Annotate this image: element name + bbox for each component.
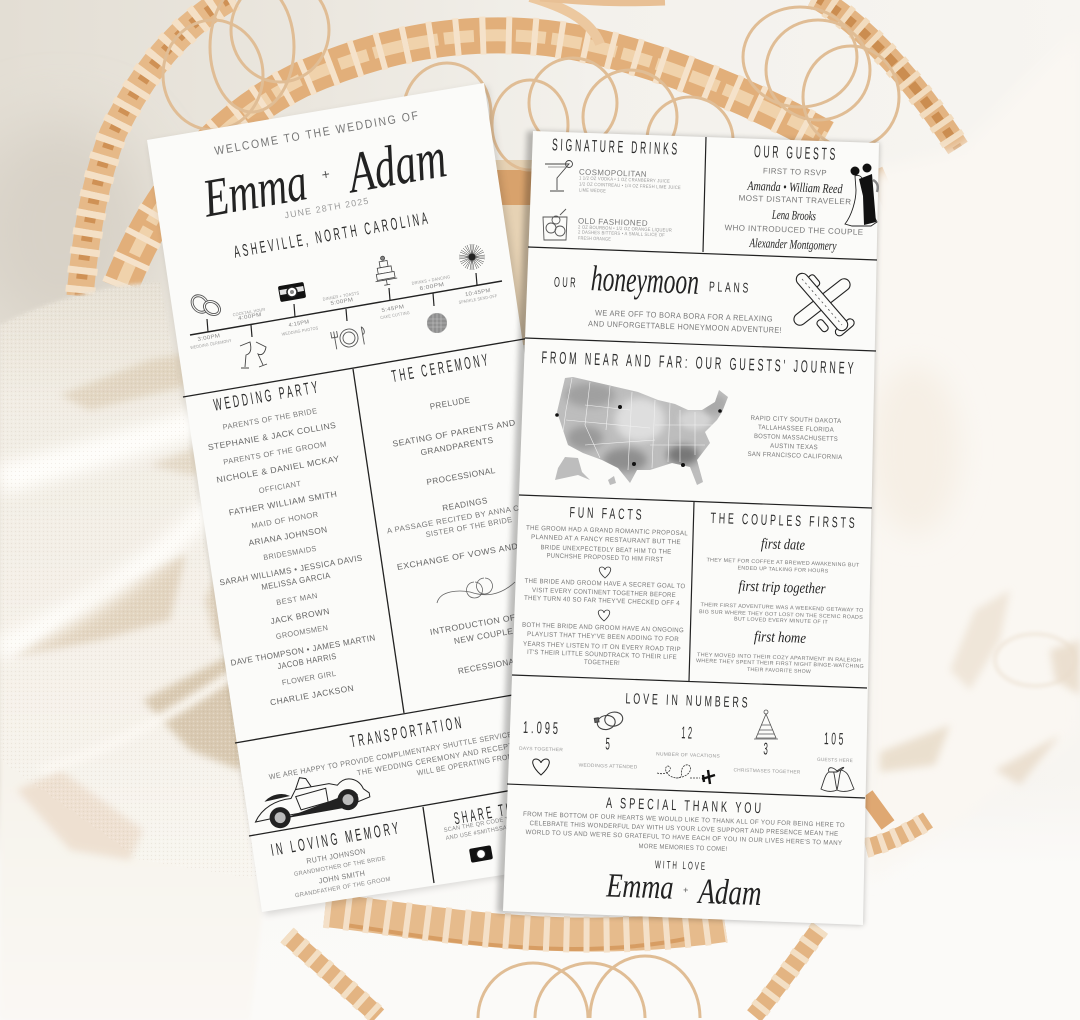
panel: the couples firsts: first date [761, 536, 806, 554]
panel: the couples firsts: THEY MOVED INTO THEIR COZY APARTMENT IN RALEIGH [697, 652, 861, 664]
section dividers [183, 338, 530, 883]
panel: fun facts [522, 504, 688, 667]
panel: wedding party: JACOB HARRIS [277, 651, 337, 671]
loops: rattan rings [163, 0, 899, 1018]
couple names script [198, 124, 451, 229]
panel: guests journey map: TALLAHASSEE FLORIDA [758, 424, 834, 434]
panel: wedding party: STEPHANIE & JACK COLLINS [207, 420, 337, 452]
panel: wedding party: FATHER WILLIAM SMITH [228, 489, 338, 517]
panel: love in numbers: NUMBER OF VACATIONS [656, 751, 720, 760]
panel: the couples firsts: WHERE THEY SPENT THEIR FIRST NIGHT BINGE-WATCHING [696, 658, 864, 670]
side rim right of card [875, 170, 892, 208]
timeline: SPARKLE SEND-OFF [458, 293, 498, 305]
panel: wedding party: CHARLIE JACKSON [269, 683, 355, 707]
lace veil: right [868, 30, 1080, 880]
signature names script: Emma [605, 867, 674, 907]
panel: a special thank you: WITH LOVE [655, 859, 707, 873]
panel: transportation: TRANSPORTATION [349, 713, 465, 751]
panel: wedding party: GROOMSMEN [275, 623, 329, 641]
panel: wedding party: BEST MAN [276, 591, 318, 607]
timeline: 3:00PM [197, 333, 221, 343]
panel: our guests: Lena Brooks [771, 207, 816, 223]
inner rim top [120, 0, 825, 288]
panel: fun facts: PUNCHSHE PROPOSED TO HIM FIRST [546, 552, 664, 564]
panel: love in numbers: 3 [763, 739, 771, 759]
icon: champagne glasses [240, 342, 267, 368]
panel: guests journey map: RAPID CITY SOUTH DAKOTA [750, 415, 842, 425]
panel: the ceremony: GRANDPARENTS [420, 435, 494, 457]
couple names script: + [320, 165, 332, 183]
panel: love in numbers: LOVE IN NUMBERS [625, 690, 751, 712]
panel: the couples firsts: THE COUPLES FIRSTS [710, 510, 858, 532]
panel: the couples firsts: THEIR FIRST ADVENTURE WAS A WEEKEND GETAWAY TO [700, 602, 864, 614]
timeline: WEDDING CEREMONY [190, 338, 232, 350]
panel: the couples firsts: ENDED UP TALKING FOR HOURS [737, 565, 829, 575]
panel: the couples firsts: BIG SUR WHERE THEY GOT LOST ON THE SCENIC ROADS [699, 609, 863, 621]
panel: signature drinks: 1/2 OZ COINTREAU • 1/4 OZ FRESH LIME JUICE [579, 182, 681, 191]
panel: guests journey map: AUSTIN TEXAS [770, 443, 818, 451]
icon: sparkler [459, 244, 485, 270]
panel: love in numbers [519, 690, 854, 791]
panel: wedding party: NICHOLE & DANIEL MCKAY [216, 453, 340, 485]
panel: share: SCAN THE QR CODE TO UPLOAD [443, 811, 540, 834]
panel: the couples firsts: first trip together [738, 578, 826, 598]
icon: wedding rings [187, 291, 223, 319]
panel: honeymoon plans [554, 258, 856, 337]
couple names script: Adam [340, 124, 451, 206]
panel: fun facts: TOGETHER! [584, 659, 620, 667]
panel: love in numbers: 12 [681, 723, 695, 743]
outer rim right [813, 0, 958, 148]
panel: signature drinks: 2 OZ BOURBON • 1/2 OZ ORANGE LIQUEUR [578, 225, 672, 234]
icon: wedding bells [821, 767, 854, 791]
panel: fun facts: IT'S THEIR LITTLE SOUNDTRACK TO THEIR LIFE [527, 649, 677, 661]
panel: in loving memory: GRANDFATHER OF THE GROOM [295, 877, 391, 899]
panel: love in numbers: 1.095 [523, 718, 561, 738]
panel: in loving memory: RUTH JOHNSON [306, 846, 366, 866]
panel: signature drinks [543, 135, 681, 243]
panel: wedding party: WEDDING PARTY [212, 377, 322, 415]
panel: the ceremony: RECESSIONAL [457, 655, 520, 676]
panel: share [443, 791, 560, 863]
panel: love in numbers: 5 [605, 734, 613, 754]
panel: in loving memory [269, 818, 403, 899]
panel: signature drinks: SIGNATURE DRINKS [552, 135, 680, 159]
panel: signature drinks: FRESH ORANGE [578, 236, 611, 243]
woven band bottom [325, 910, 725, 949]
icon: old fashioned glass [543, 209, 567, 240]
icon: wedding cake [371, 254, 398, 287]
icon: camera [278, 282, 306, 302]
panel: a special thank you: FROM THE BOTTOM OF OUR HEARTS WE WOULD LIKE TO THANK ALL OF YOU FOR BEING HERE TO [523, 811, 845, 829]
panel: fun facts: BOTH THE BRIDE AND GROOM HAVE AN ONGOING [522, 622, 684, 634]
panel: wedding party: PARENTS OF THE GROOM [223, 439, 327, 467]
timeline: COCKTAIL HOUR [232, 307, 266, 317]
panel: honeymoon plans: WE ARE OFF TO BORA BORA FOR A RELAXING [595, 308, 773, 324]
panel: wedding party: OFFICIANT [258, 479, 302, 495]
icon: airplane [792, 271, 856, 337]
panel: wedding party: BRIDESMAIDS [263, 544, 317, 562]
location: ASHEVILLE, NORTH CAROLINA [232, 208, 432, 262]
panel: signature drinks: OLD FASHIONED [578, 217, 648, 228]
timeline: 6:00PM [419, 282, 445, 292]
panel: our guests: OUR GUESTS [754, 142, 838, 164]
panel: fun facts: BRIDE UNEXPECTEDLY BEAT HIM TO THE [540, 544, 672, 556]
icon: vintage car [249, 766, 372, 832]
icon: small camera [469, 845, 493, 863]
timeline: DINNER + TOASTS [322, 290, 360, 302]
panel: our guests: FIRST TO RSVP [763, 166, 827, 178]
panel: wedding party: MAID OF HONOR [251, 510, 319, 530]
panel: guests journey map [541, 348, 857, 490]
panel: the couples firsts [696, 510, 864, 675]
icon: heart [598, 610, 610, 621]
rim bottom left [287, 935, 378, 1016]
signature names script [605, 867, 762, 913]
panel: love in numbers: GUESTS HERE [817, 757, 853, 764]
icon: plate and cutlery [331, 326, 367, 350]
timeline: 4:00PM [238, 312, 262, 322]
panel: the couples firsts: BUT LOVED EVERY MINUTE OF IT [734, 616, 829, 626]
panel: the ceremony: INTRODUCTION OF THE [429, 608, 537, 637]
panel: the ceremony: PROCESSIONAL [426, 465, 496, 487]
panel: signature drinks: LIME WEDGE [579, 188, 606, 194]
panel: wedding party: FLOWER GIRL [281, 669, 337, 687]
panel: our guests: WHO INTRODUCED THE COUPLE [724, 223, 864, 237]
panel: fun facts: THEY TURN 40 SO FAR THEY'VE CHECKED OFF 4 [524, 595, 680, 607]
panel: the couples firsts: THEIR FAVORITE SHOW [747, 667, 811, 675]
panel: our guests [724, 142, 878, 253]
icon: disco ball [427, 313, 447, 333]
panel: love in numbers: WEDDINGS ATTENDED [578, 762, 638, 771]
icon: heart [533, 759, 549, 775]
panel: the couples firsts: THEY MET FOR COFFEE AT BREWED AWAKENING BUT [706, 557, 860, 569]
rim bottom right [754, 928, 820, 1016]
panel: a special thank you: MORE MEMORIES TO COME! [638, 843, 728, 853]
heading: welcome: WELCOME TO THE WEDDING OF [213, 108, 421, 158]
panel: fun facts: THE BRIDE AND GROOM HAVE A SECRET GOAL TO [524, 578, 686, 590]
panel: a special thank you: A SPECIAL THANK YOU [606, 795, 764, 817]
panel: the couples firsts: first home [754, 629, 807, 647]
panel: love in numbers: CHRISTMASES TOGETHER [733, 767, 801, 776]
panel: in loving memory: IN LOVING MEMORY [269, 818, 403, 860]
timeline: 4:15PM [288, 319, 310, 329]
icon: heart trail and plane [657, 765, 715, 784]
panel: wedding party: PARENTS OF THE BRIDE [222, 406, 318, 432]
map: watercolor United States [555, 377, 728, 485]
panel: honeymoon plans: honeymoon [590, 258, 700, 302]
panel: our guests: Alexander Montgomery [749, 235, 837, 253]
panel: in loving memory: JOHN SMITH [318, 868, 366, 886]
panel: the ceremony: SISTER OF THE BRIDE [425, 515, 513, 539]
panel: love in numbers: DAYS TOGETHER [519, 746, 563, 753]
icon: christmas tree [754, 710, 778, 739]
panel: the ceremony: NEW COUPLE [453, 626, 514, 646]
panel: a special thank you: CELEBRATE THIS WONDERFUL DAY WITH US YOUR LOVE SUPPORT AND PRESENCE MEAN THE [529, 820, 839, 838]
panel: signature drinks: 2 DASHES BITTERS • A SMALL SLICE OF [578, 230, 665, 239]
panel: wedding party: SARAH WILLIAMS • JESSICA DAVIS [219, 552, 363, 588]
icon: ring flourish [437, 578, 515, 603]
panel: wedding party: JACK BROWN [270, 606, 330, 626]
panel: fun facts: FUN FACTS [569, 504, 645, 524]
panel: fun facts: PLAYLIST THAT THEY'VE BEEN ADDING TO FOR [527, 631, 679, 643]
signature names script: + [683, 885, 689, 895]
panel: love in numbers: 105 [824, 729, 846, 749]
timeline [190, 273, 502, 350]
timeline: 10:45PM [465, 288, 491, 298]
card: left ceremony program: SHARE THE LOVE [452, 791, 560, 828]
date: JUNE 28TH 2025 [284, 196, 370, 220]
panel: the ceremony: THE CEREMONY [390, 350, 492, 386]
panel: wedding party [207, 377, 376, 707]
panel: guests journey map: BOSTON MASSACHUSETTS [754, 433, 838, 443]
lace veil: left [0, 282, 270, 1020]
timeline: DRINKS + DANCING [411, 274, 451, 286]
panel: fun facts: YEARS THEY LISTEN TO IT ON EVERY ROAD TRIP [523, 641, 681, 653]
panel: transportation: WE ARE HAPPY TO PROVIDE COMPLIMENTARY SHUTTLE SERVICE [268, 730, 513, 781]
panel: the ceremony: A PASSAGE RECITED BY ANNA CARTER, [386, 498, 550, 535]
icon: rings [594, 711, 624, 731]
panel: guests journey map: SAN FRANCISCO CALIFORNIA [747, 451, 843, 461]
panel: fun facts: THE GROOM HAD A GRAND ROMANTIC PROPOSAL [526, 525, 688, 537]
panel: our guests: MOST DISTANT TRAVELER [738, 194, 852, 206]
panel: in loving memory: GRANDMOTHER OF THE BRIDE [294, 856, 386, 878]
basket interior [460, 160, 540, 345]
panel: the ceremony: SEATING OF PARENTS AND [392, 417, 516, 449]
couple names script: Emma [198, 151, 311, 229]
panel: transportation [249, 713, 528, 832]
panel: share: AND USE #SMITHSSAYIDO [445, 823, 521, 842]
icon: heart [599, 567, 611, 578]
timeline: 5:45PM [381, 304, 405, 314]
panel: wedding party: DAVE THOMPSON • JAMES MARTIN [230, 632, 376, 668]
panel: honeymoon plans: PLANS [709, 278, 751, 296]
panel: our guests: Amanda • William Reed [747, 178, 843, 196]
panel: honeymoon plans: OUR [554, 274, 578, 290]
panel: fun facts: VISIT EVERY CONTINENT TOGETHER BEFORE [532, 587, 676, 599]
timeline: 5:00PM [330, 297, 354, 307]
panel: the ceremony [386, 350, 551, 676]
panel: signature drinks: COSMOPOLITAN [579, 168, 647, 179]
panel: fun facts: PLANNED AT A FANCY RESTAURANT BUT THE [531, 534, 681, 546]
panel: the ceremony: PRELUDE [429, 395, 471, 411]
panel: transportation: WILL BE OPERATING FROM [416, 752, 514, 777]
panel: signature drinks: 1 1/2 OZ VODKA • 1 OZ CRANBERRY JUICE [579, 176, 670, 185]
panel: transportation: THE WEDDING CEREMONY AND RECEPTION [356, 739, 528, 777]
section dividers [507, 137, 877, 798]
rim fragment right [866, 795, 928, 848]
card: right reception program [497, 131, 879, 925]
panel: a special thank you [523, 795, 845, 913]
panel: wedding party: ARIANA JOHNSON [248, 524, 328, 548]
panel: honeymoon plans: AND UNFORGETTABLE HONEYMOON ADVENTURE! [588, 319, 782, 335]
panel: the ceremony: EXCHANGE OF VOWS AND RINGS [396, 535, 551, 572]
panel: a special thank you: WORLD TO US AND WE'RE SO GRATEFUL TO HAVE EACH OF YOU IN OUR LIVES HERE'S TO MANY [525, 829, 843, 847]
timeline: WEDDING PHOTOS [281, 325, 319, 337]
card: left ceremony program [147, 83, 603, 915]
outer rim left [80, 0, 233, 296]
icon: bride and groom [845, 164, 878, 226]
signature names script: Adam [696, 871, 762, 913]
panel: wedding party: MELISSA GARCIA [261, 570, 331, 592]
icon: cocktail glass [545, 160, 572, 191]
panel: the ceremony: READINGS [441, 495, 489, 513]
timeline: CAKE CUTTING [380, 310, 411, 320]
